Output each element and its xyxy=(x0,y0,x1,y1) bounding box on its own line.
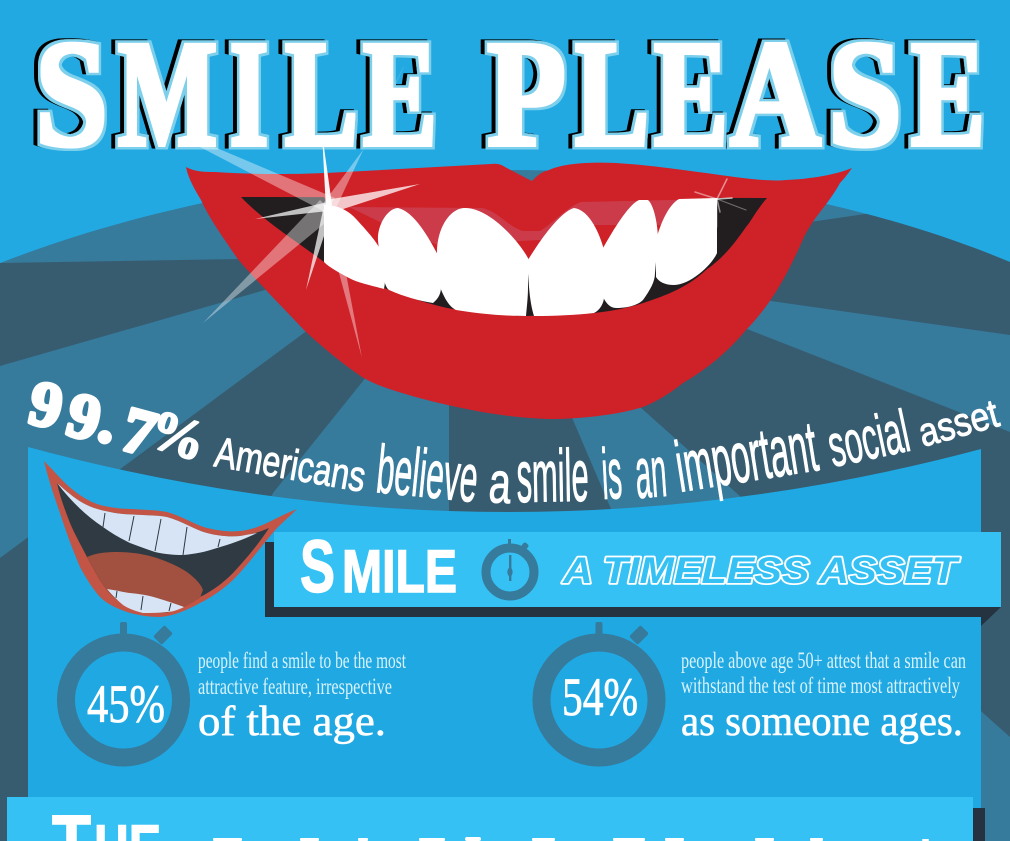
headline: 99.7% Americans believe a smile is an important social asset: social xyxy=(822,397,915,480)
title: E xyxy=(654,10,728,179)
headline: 99.7% Americans believe a smile is an important social asset: Americans xyxy=(211,429,369,502)
cropped heading word: the xyxy=(52,800,161,841)
headline: 99.7% Americans believe a smile is an important social asset: 7 xyxy=(114,393,164,470)
title: P xyxy=(487,10,566,179)
banner heading: smile: MILE xyxy=(342,538,457,605)
headline: 99.7% Americans believe a smile is an important social asset: smile xyxy=(516,434,589,518)
teeth xyxy=(324,198,717,316)
banner subheading: a timeless asset: A TIMELESS ASSET xyxy=(562,550,961,591)
headline: 99.7% Americans believe a smile is an important social asset: is xyxy=(600,434,624,515)
headline: 99.7% Americans believe a smile is an important social asset: % xyxy=(141,398,214,474)
text: 45% description xyxy=(198,648,406,745)
icon: banner stopwatch xyxy=(486,539,534,596)
large sparkle on tooth xyxy=(200,67,420,358)
headline: 99.7% Americans believe a smile is an important social asset: an xyxy=(633,432,669,514)
text: 54% description xyxy=(681,648,966,745)
headline: 99.7% Americans believe a smile is an important social asset: 9 xyxy=(60,378,108,455)
headline: 99.7% Americans believe a smile is an important social asset: 9 xyxy=(23,366,69,443)
headline: 99.7% Americans believe a smile is an important social asset xyxy=(23,366,1003,518)
headline: 99.7% Americans believe a smile is an important social asset: important xyxy=(670,407,823,508)
banner: bottom section heading, cropped xyxy=(7,797,985,841)
text: 45% description: people find a smile to be the most xyxy=(198,648,406,673)
stat: 54% stopwatch xyxy=(542,622,656,758)
lower teeth xyxy=(107,589,184,613)
gum highlight xyxy=(349,199,715,245)
title: S xyxy=(828,10,902,179)
stat: 45% stopwatch: 45% xyxy=(87,674,165,734)
stat: 54% stopwatch: 54% xyxy=(562,667,638,727)
headline: 99.7% Americans believe a smile is an important social asset: a xyxy=(487,450,513,516)
headline: 99.7% Americans believe a smile is an important social asset: believe xyxy=(374,431,482,517)
title: I xyxy=(230,10,268,179)
upper teeth xyxy=(57,483,257,555)
headline: 99.7% Americans believe a smile is an important social asset: . xyxy=(92,384,126,457)
small sparkle on tooth xyxy=(695,179,746,227)
title xyxy=(35,10,985,179)
title: L xyxy=(285,10,358,179)
title: A xyxy=(730,10,821,179)
banner: smile a timeless asset xyxy=(265,525,1001,626)
panel: timeless asset xyxy=(28,447,981,841)
title: M xyxy=(118,10,217,179)
mouth interior xyxy=(241,197,767,316)
tongue xyxy=(87,552,203,613)
text: 45% description: of the age. xyxy=(198,699,386,745)
banner heading: smile: S xyxy=(300,525,335,608)
title: L xyxy=(575,10,649,179)
text: 45% description: attractive feature, irrespective xyxy=(198,674,392,699)
banner heading: smile xyxy=(300,525,457,608)
title: E xyxy=(363,10,437,179)
icon: open laughing mouth xyxy=(44,461,297,617)
cropped outlined heading tops xyxy=(213,837,929,841)
stat: 45% stopwatch xyxy=(66,622,181,758)
text: 54% description: as someone ages. xyxy=(681,699,963,745)
title: S xyxy=(35,10,108,179)
big red lips xyxy=(186,163,852,419)
